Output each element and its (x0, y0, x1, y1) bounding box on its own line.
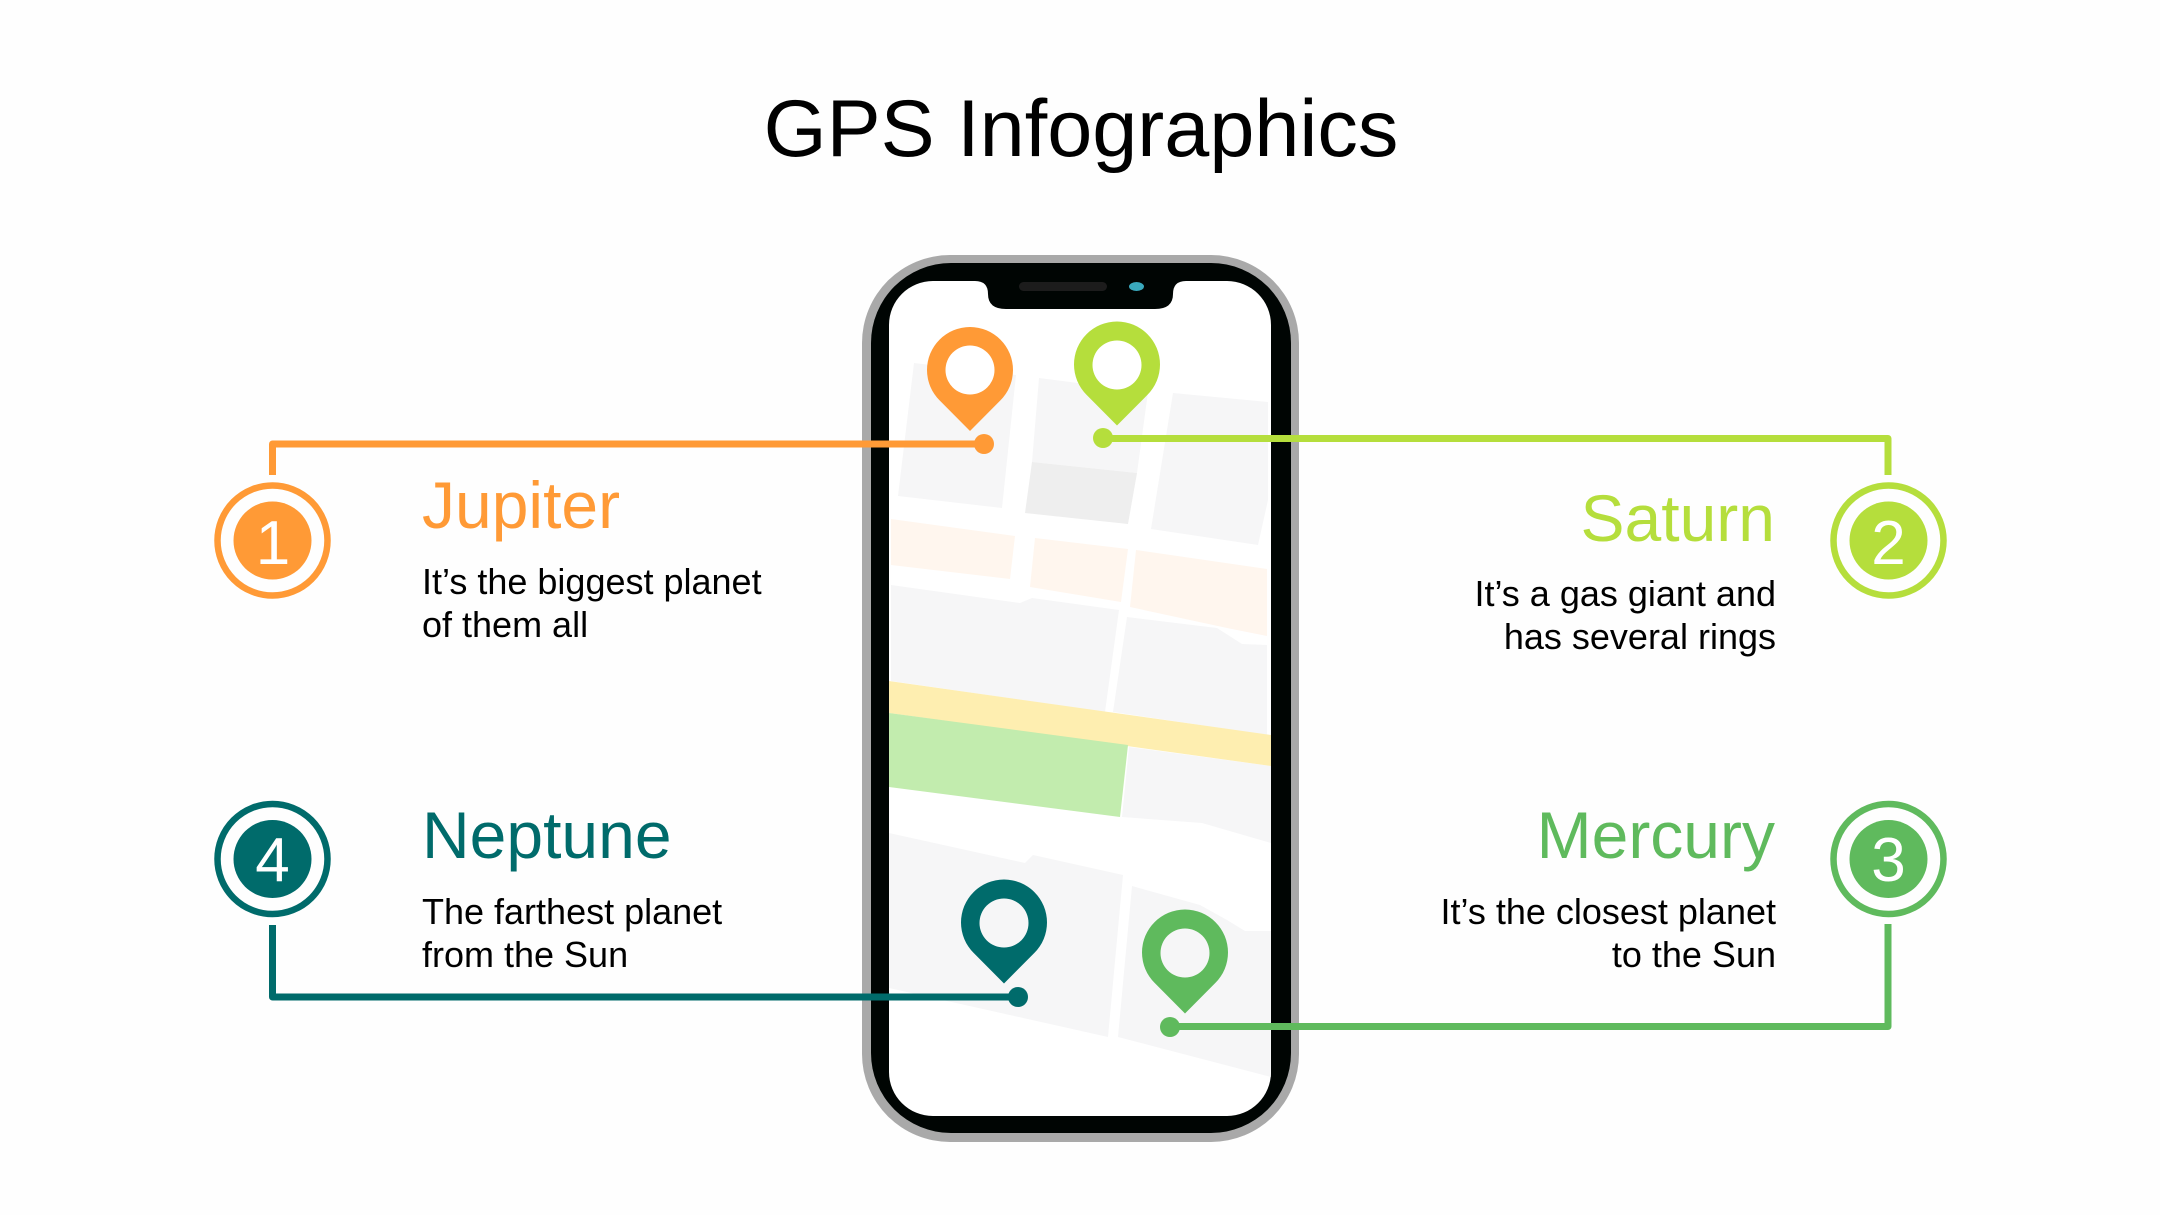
text: Neptune: from the Sun (422, 934, 628, 975)
badge: 3 (1834, 804, 1944, 914)
pin: lime (1074, 321, 1160, 426)
text: Saturn: Saturn (1581, 481, 1775, 555)
connector: orange (272, 434, 994, 475)
phone (862, 255, 1299, 1142)
speaker (1019, 282, 1107, 291)
text: Neptune (422, 798, 722, 975)
badge: 4 (218, 804, 328, 914)
badge: 3: 3 (1871, 826, 1906, 895)
phone bezel (871, 263, 1291, 1133)
phone screen (889, 281, 1271, 1116)
text: Mercury (1440, 798, 1776, 975)
connector: lime (1093, 428, 1888, 475)
text: Saturn: has several rings (1504, 616, 1776, 657)
connector: green (1160, 924, 1888, 1037)
text: Jupiter: It’s the biggest planet (422, 561, 762, 602)
title: GPS Infographics (764, 84, 1398, 174)
camera (1129, 282, 1144, 291)
text: Mercury: to the Sun (1612, 934, 1776, 975)
badge: 2 (1834, 486, 1944, 596)
badge: 2: 2 (1871, 509, 1906, 578)
text: Jupiter: Jupiter (422, 468, 620, 542)
badge: 4: 4 (255, 826, 290, 895)
text: Jupiter (422, 468, 762, 645)
badge: 1: 1 (256, 509, 290, 578)
text: Jupiter: of them all (422, 604, 588, 645)
text: Neptune: The farthest planet (422, 891, 722, 932)
pin: teal (961, 879, 1047, 984)
phone body (862, 255, 1299, 1142)
text: Saturn (1474, 481, 1776, 657)
badge: 1 (218, 486, 328, 596)
text: Saturn: It’s a gas giant and (1474, 573, 1776, 614)
text: Mercury: It’s the closest planet (1440, 891, 1776, 932)
pin: orange (927, 327, 1013, 431)
text: Neptune: Neptune (422, 798, 672, 872)
connector: teal (272, 925, 1028, 1007)
map (889, 363, 1271, 1077)
pin: green (1142, 909, 1228, 1014)
text: Mercury: Mercury (1537, 798, 1775, 872)
